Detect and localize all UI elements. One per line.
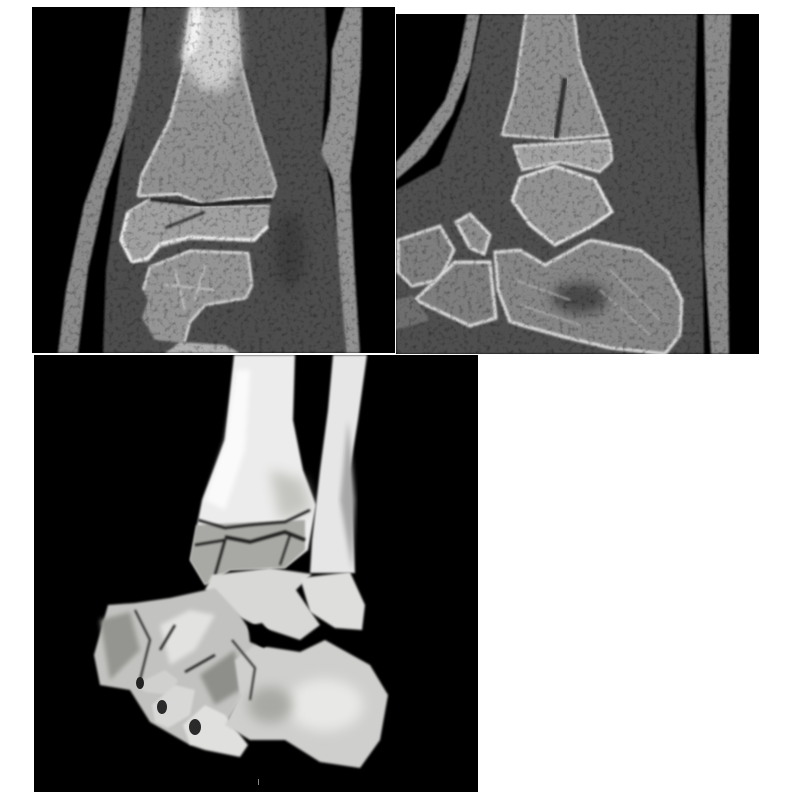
tibial fracture lines — [195, 510, 310, 575]
navicular — [456, 214, 490, 254]
anterior skin strip — [396, 14, 480, 180]
panel: 3D bone reconstruction — [34, 355, 478, 792]
metatarsal fragment — [396, 295, 430, 330]
soft tissue — [103, 7, 346, 353]
tibial epiphysis — [121, 199, 270, 262]
talus — [205, 568, 320, 640]
tibia shaft — [138, 7, 276, 205]
right skin strip — [321, 7, 362, 353]
tibia — [190, 355, 316, 585]
talus — [142, 250, 252, 343]
tibial epiphysis — [514, 140, 612, 172]
talus — [512, 166, 612, 245]
calcaneus — [225, 640, 388, 768]
panel: sagittal CT slice — [396, 14, 759, 354]
cuneiform — [398, 226, 454, 286]
fracture gap — [150, 199, 272, 205]
midfoot — [94, 588, 262, 745]
posterior skin strip — [704, 14, 731, 354]
sinus tarsi hole — [248, 623, 275, 648]
panel: coronal CT slice — [32, 7, 395, 353]
lateral malleolus — [300, 572, 365, 630]
speck — [258, 779, 259, 785]
calcaneus edge — [165, 342, 240, 353]
metatarsal stumps — [142, 671, 177, 694]
fibula — [310, 355, 367, 573]
cuboid — [415, 262, 496, 326]
soft tissue — [396, 14, 704, 354]
fracture line — [556, 78, 565, 138]
tibia shaft — [502, 14, 608, 139]
left skin strip — [58, 7, 143, 353]
calcaneus — [495, 240, 682, 354]
